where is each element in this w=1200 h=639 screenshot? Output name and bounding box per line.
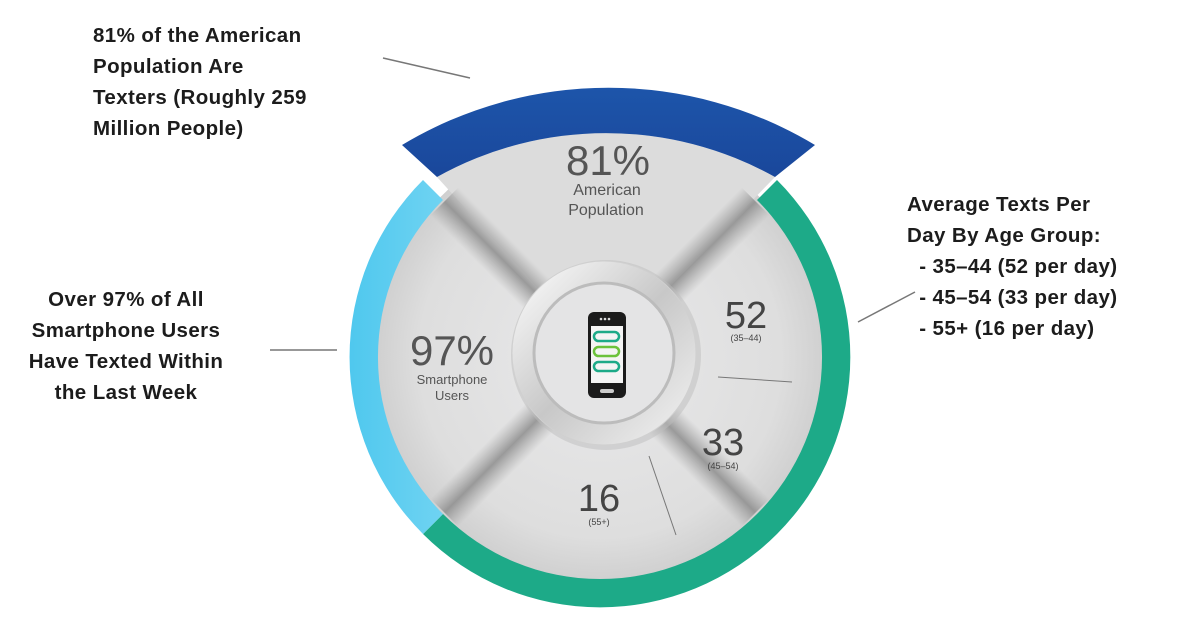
callout: right text: - 35–44 (52 per day) [919, 255, 1118, 278]
stat: 81% American Population: 81% [566, 137, 650, 184]
stat: 97% Smartphone Users: Users [435, 388, 469, 403]
stat: 16 (55+): 16 [578, 478, 620, 520]
callout: top text [93, 24, 307, 140]
stat: 33 (45-54): 33 [702, 422, 744, 464]
grey disc [374, 131, 826, 583]
stat: 97% Smartphone Users: Smartphone [417, 372, 487, 387]
stat: 97% Smartphone Users [410, 327, 494, 403]
ring: green arc right and bottom [423, 180, 850, 607]
callout: left text: Smartphone Users [32, 319, 220, 342]
top quadrant panel [437, 133, 775, 357]
icon: smartphone with chat bubbles [588, 312, 626, 398]
callout: left text: Have Texted Within [29, 350, 223, 373]
callout: left text: Over 97% of All [48, 288, 204, 311]
ring: dark blue top arc [402, 88, 815, 177]
stat: 81% American Population: Population [568, 202, 644, 219]
stat: 52 (35-44): (35–44) [730, 333, 762, 343]
callout: top text: 81% of the American [93, 24, 302, 47]
callout: top text: Population Are [93, 55, 244, 78]
stat: 97% Smartphone Users: 97% [410, 327, 494, 374]
callout: right text: Day By Age Group: [907, 224, 1101, 247]
callout: right text: - 55+ (16 per day) [919, 317, 1094, 340]
callout: left text: the Last Week [55, 381, 197, 404]
ring: light blue arc left [350, 180, 443, 534]
stat: 33 (45-54): (45–54) [707, 461, 739, 471]
callout: left text [29, 288, 223, 404]
callout: top text: Texters (Roughly 259 [93, 86, 307, 109]
callout: top text: Million People) [93, 117, 244, 140]
stat: 52 (35-44): 52 [725, 295, 767, 337]
stat: 81% American Population: American [573, 182, 641, 199]
center ring [511, 260, 701, 450]
leader line: top [383, 58, 470, 78]
callout: right text [907, 193, 1118, 340]
stat: 16 (55+): (55+) [588, 517, 610, 527]
leader line: left [270, 349, 337, 351]
callout: right text: Average Texts Per [907, 193, 1090, 216]
stat: 81% American Population [566, 137, 650, 219]
diagonal shading bands [430, 187, 770, 527]
leader line: right [858, 292, 915, 322]
callout: right text: - 45–54 (33 per day) [919, 286, 1118, 309]
